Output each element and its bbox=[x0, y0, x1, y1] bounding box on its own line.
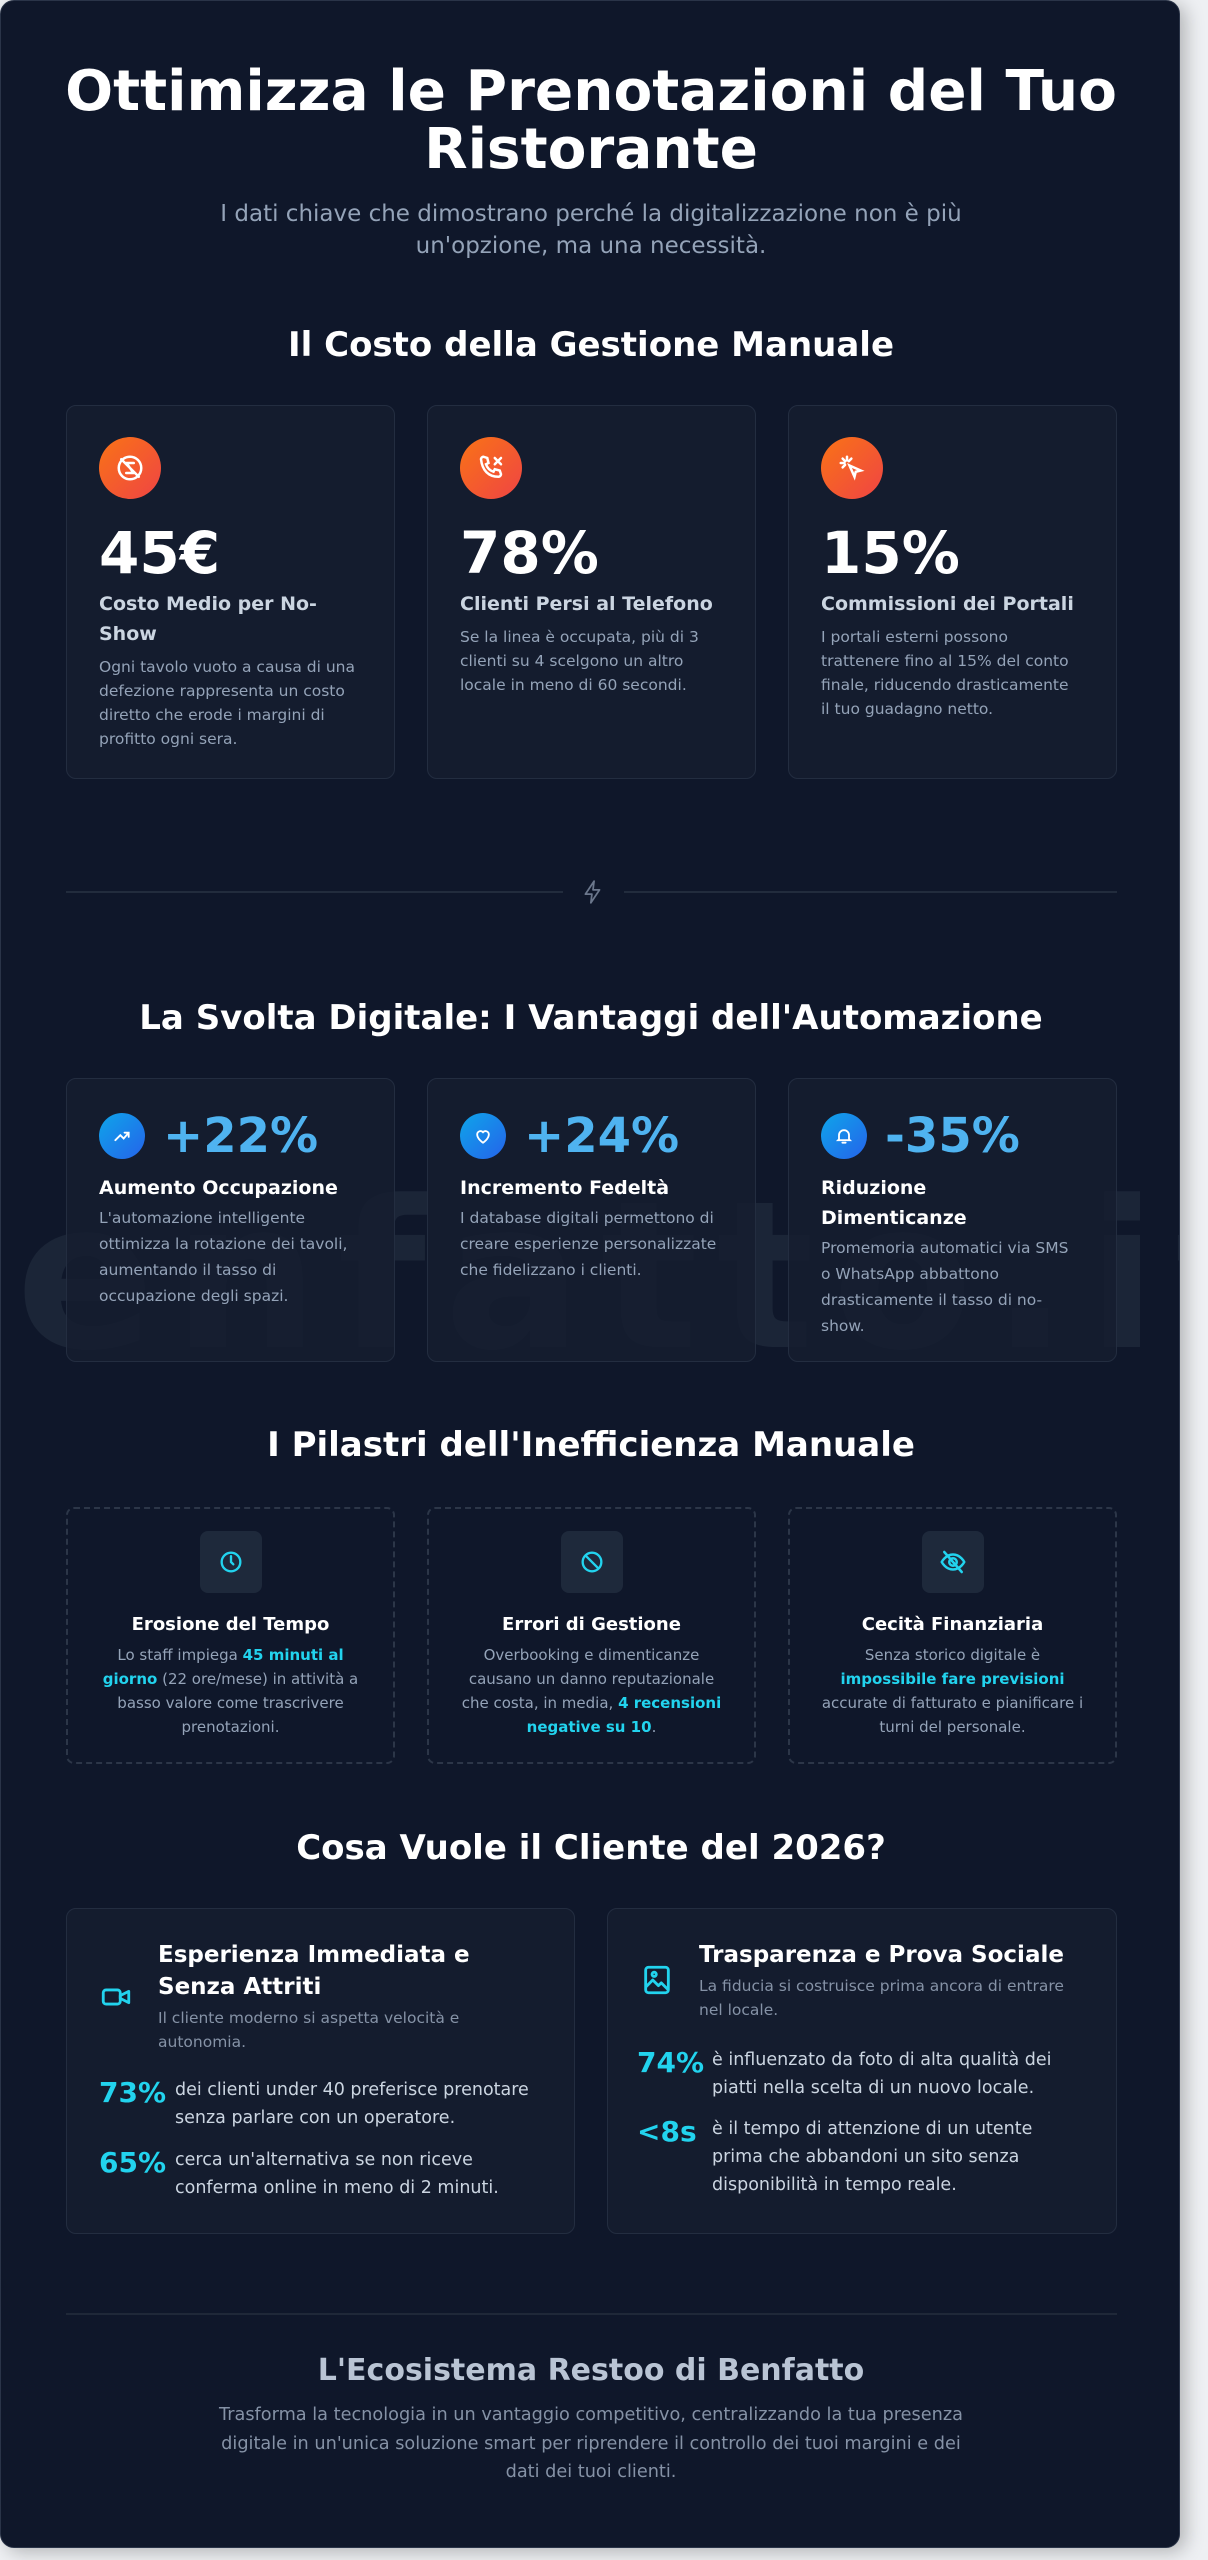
panel: cost card 3: il tuo guadagno netto. bbox=[821, 700, 993, 718]
panel: pillar 1: basso valore come trascrivere bbox=[117, 1694, 344, 1712]
panel: esperienza immediata: Il cliente moderno si aspetta velocità e bbox=[158, 2009, 459, 2027]
panel: cost card 1 bbox=[66, 405, 395, 779]
panel: benefit 1: occupazione degli spazi. bbox=[99, 1287, 288, 1305]
stat: 45€ bbox=[99, 519, 220, 587]
panel: benefit 1: ottimizza la rotazione dei tavoli, bbox=[99, 1235, 347, 1253]
panel: pillar 3 bbox=[788, 1507, 1117, 1764]
stat 8s bbox=[637, 2115, 1032, 2195]
panel: benefit 3: o WhatsApp abbattono bbox=[821, 1265, 999, 1283]
stat 73: dei clienti under 40 preferisce prenotare bbox=[175, 2080, 529, 2100]
stat 74: è influenzato da foto di alta qualità dei bbox=[712, 2050, 1052, 2070]
panel: cost card 2: clienti su 4 scelgono un altro bbox=[460, 652, 683, 670]
panel: pillar 1: Lo staff impiega 45 minuti al bbox=[117, 1646, 344, 1664]
stat 74: 74% bbox=[637, 2046, 704, 2079]
panel: benefit 2: creare esperienze personalizzate bbox=[460, 1235, 716, 1253]
stat 8s: è il tempo di attenzione di un utente bbox=[712, 2119, 1032, 2139]
panel: pillar 3: Senza storico digitale è bbox=[865, 1646, 1040, 1664]
panel: cost card 2: 78% bbox=[460, 519, 599, 587]
panel: cost card 2: locale in meno di 60 secondi. bbox=[460, 676, 687, 694]
panel: cost card 3: 15% bbox=[821, 519, 960, 587]
stat 73: 73% bbox=[99, 2076, 166, 2109]
panel: esperienza immediata: Esperienza Immediata e bbox=[158, 1942, 470, 1968]
title bbox=[65, 59, 1117, 182]
panel: benefit 1: aumentando il tasso di bbox=[99, 1261, 276, 1279]
divider with lightning icon bbox=[66, 880, 1117, 904]
panel: pillar 2: negative su 10. bbox=[527, 1718, 656, 1736]
stat 8s: <8s bbox=[637, 2115, 697, 2148]
panel: esperienza immediata: Senza Attriti bbox=[158, 1974, 321, 2000]
panel: pillar 2: causano un danno reputazionale bbox=[469, 1670, 714, 1688]
subtitle bbox=[220, 201, 962, 259]
panel: esperienza immediata bbox=[66, 1908, 575, 2234]
stat 74 bbox=[637, 2046, 1052, 2098]
title: Ristorante bbox=[424, 117, 758, 182]
footer text: Trasforma la tecnologia in un vantaggio competitivo, centralizzando la tua presenza bbox=[219, 2405, 963, 2425]
panel: pillar 2: Overbooking e dimenticanze bbox=[484, 1646, 699, 1664]
panel: benefit 3: show. bbox=[821, 1317, 865, 1335]
heading: cliente 2026: Cosa Vuole il Cliente del 2026? bbox=[296, 1828, 886, 1868]
stat 65: cerca un'alternativa se non riceve bbox=[175, 2150, 473, 2170]
heading: svolta digitale: La Svolta Digitale: I Vantaggi dell'Automazione bbox=[139, 998, 1043, 1038]
panel: pillar 1 bbox=[66, 1507, 395, 1764]
panel: cost card 1: Show bbox=[99, 623, 157, 645]
stat 8s: disponibilità in tempo reale. bbox=[712, 2175, 957, 2195]
stat 8s: prima che abbandoni un sito senza bbox=[712, 2147, 1019, 2167]
panel: cost card 3: finale, riducendo drasticamente bbox=[821, 676, 1069, 694]
panel: cost card 1: Ogni tavolo vuoto a causa di una bbox=[99, 658, 355, 676]
icon: eye off bbox=[922, 1531, 984, 1593]
panel: pillar 3: turni del personale. bbox=[879, 1718, 1026, 1736]
panel: cost card 3: I portali esterni possono bbox=[821, 628, 1008, 646]
panel: pillar 3: Cecità Finanziaria bbox=[862, 1614, 1043, 1635]
panel: pillar 2 bbox=[427, 1507, 756, 1764]
panel: pillar 2: Errori di Gestione bbox=[502, 1614, 681, 1635]
icon: video bbox=[102, 1988, 130, 2006]
panel: benefit 3: -35% bbox=[885, 1108, 1020, 1164]
subtitle: I dati chiave che dimostrano perché la digitalizzazione non è più bbox=[220, 201, 962, 227]
panel: esperienza immediata: autonomia. bbox=[158, 2033, 246, 2051]
panel: benefit 1 bbox=[66, 1078, 395, 1362]
panel: cost card 1: Costo Medio per No- bbox=[99, 593, 317, 615]
panel: benefit 1: Aumento Occupazione bbox=[99, 1177, 338, 1199]
panel: benefit 1: L'automazione intelligente bbox=[99, 1209, 305, 1227]
panel: cost card 2: Clienti Persi al Telefono bbox=[460, 593, 713, 615]
stat 74: piatti nella scelta di un nuovo locale. bbox=[712, 2078, 1034, 2098]
panel: benefit 2: Incremento Fedeltà bbox=[460, 1177, 669, 1199]
subtitle: un'opzione, ma una necessità. bbox=[416, 233, 766, 259]
panel: benefit 3: drasticamente il tasso di no- bbox=[821, 1291, 1042, 1309]
panel: cost card 1: profitto ogni sera. bbox=[99, 730, 237, 748]
footer text bbox=[218, 2405, 963, 2482]
panel: cost card 1: diretto che erode i margini di bbox=[99, 706, 325, 724]
panel: pillar 1: prenotazioni. bbox=[181, 1718, 280, 1736]
panel: benefit 3 bbox=[788, 1078, 1117, 1362]
panel: trasparenza bbox=[607, 1908, 1117, 2234]
panel: cost card 2: Se la linea è occupata, più di 3 bbox=[460, 628, 699, 646]
panel: trasparenza: Trasparenza e Prova Sociale bbox=[699, 1942, 1064, 1968]
stat 73 bbox=[99, 2076, 529, 2128]
panel: cost card 3: Commissioni dei Portali bbox=[821, 593, 1074, 615]
icon: phone off bbox=[460, 437, 522, 499]
footer heading: L'Ecosistema Restoo di Benfatto bbox=[318, 2353, 864, 2388]
panel: trasparenza: La fiducia si costruisce prima ancora di entrare bbox=[699, 1977, 1064, 1995]
panel: pillar 1: Erosione del Tempo bbox=[132, 1614, 329, 1635]
panel: benefit 2 bbox=[427, 1078, 756, 1362]
panel: pillar 3: accurate di fatturato e pianificare i bbox=[822, 1694, 1083, 1712]
icon: click bbox=[821, 437, 883, 499]
panel: cost card 3 bbox=[788, 405, 1117, 779]
panel: benefit 3: Dimenticanze bbox=[821, 1207, 967, 1229]
stat 65: conferma online in meno di 2 minuti. bbox=[175, 2178, 499, 2198]
panel: cost card 3: trattenere fino al 15% del conto bbox=[821, 652, 1069, 670]
panel: benefit 3: Riduzione bbox=[821, 1177, 926, 1199]
footer text: dati dei tuoi clienti. bbox=[506, 2462, 676, 2482]
panel: cost card 1: defezione rappresenta un costo bbox=[99, 682, 345, 700]
icon: image bbox=[644, 1966, 670, 1994]
panel: pillar 2: che costa, in media, 4 recensioni bbox=[462, 1694, 721, 1712]
panel: benefit 2: +24% bbox=[524, 1108, 679, 1164]
icon: clock bbox=[200, 1531, 262, 1593]
heading: pilastri: I Pilastri dell'Inefficienza Manuale bbox=[267, 1425, 915, 1465]
panel: pillar 1: giorno (22 ore/mese) in attività a bbox=[103, 1670, 358, 1688]
panel: pillar 3: impossibile fare previsioni bbox=[840, 1670, 1065, 1688]
panel: benefit 2: che fidelizzano i clienti. bbox=[460, 1261, 642, 1279]
panel: cost card 2 bbox=[427, 405, 756, 779]
stat 73: senza parlare con un operatore. bbox=[175, 2108, 455, 2128]
heading: costo: Il Costo della Gestione Manuale bbox=[288, 325, 894, 365]
title: Ottimizza le Prenotazioni del Tuo bbox=[65, 59, 1117, 124]
icon: no-show bbox=[99, 437, 161, 499]
panel: benefit 2: I database digitali permettono di bbox=[460, 1209, 714, 1227]
footer text: digitale in un'unica soluzione smart per riprendere il controllo dei tuoi margini e dei bbox=[221, 2434, 961, 2454]
stat 65: 65% bbox=[99, 2146, 166, 2179]
icon: ban bbox=[560, 1531, 622, 1593]
stat 65 bbox=[99, 2146, 499, 2198]
stat row: +22% bbox=[163, 1108, 318, 1164]
panel: trasparenza: nel locale. bbox=[699, 2001, 778, 2019]
panel: benefit 3: Promemoria automatici via SMS bbox=[821, 1239, 1068, 1257]
